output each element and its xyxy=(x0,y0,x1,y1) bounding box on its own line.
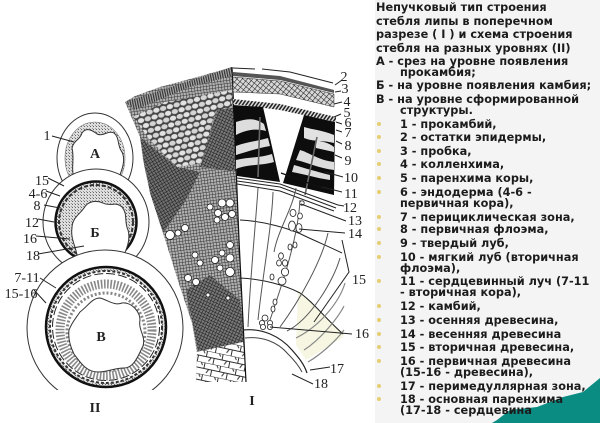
labels and leaders II: II xyxy=(90,401,100,416)
right wood vessels xyxy=(259,201,304,330)
legend heading: структуры. xyxy=(400,104,473,117)
legend heading: Непучковый тип строения xyxy=(376,1,547,14)
labels I: 5 xyxy=(344,106,350,121)
leader lines I xyxy=(270,80,352,384)
legend items: 7 - перициклическая зона, xyxy=(400,211,575,224)
legend items: - вторичная кора), xyxy=(400,286,521,299)
section В: В xyxy=(96,330,106,345)
vessels xyxy=(166,199,236,300)
labels I: 13 xyxy=(348,214,362,229)
rays through phloem xyxy=(258,117,317,195)
labels and leaders II xyxy=(5,129,100,416)
legend items: 13 - осенняя древесина, xyxy=(400,314,558,327)
legend heading: Б - на уровне появления камбия; xyxy=(376,79,591,92)
legend items: 9 - твердый луб, xyxy=(400,237,509,250)
labels I: 3 xyxy=(342,82,348,97)
legend items: 15 - вторичная древесина, xyxy=(400,341,574,354)
legend items: 1 - прокамбий, xyxy=(400,118,497,131)
labels I: 14 xyxy=(348,227,362,242)
labels and leaders II: 16 xyxy=(23,232,37,247)
central dividing line xyxy=(232,67,246,382)
left phloem wedge xyxy=(233,105,280,182)
dark phloem ray left xyxy=(140,137,200,233)
legend heading: В - на уровне сформированной xyxy=(376,93,579,106)
diagram I: left half, micrograph of tissue xyxy=(125,67,246,382)
diagram I: right half, schematic xyxy=(232,67,369,409)
legend items: 16 - первичная древесина xyxy=(400,355,571,368)
legend items: 3 - пробка, xyxy=(400,145,472,158)
diagram II: stem cross-sections xyxy=(5,113,183,416)
labels I: 8 xyxy=(344,139,352,154)
hatched band xyxy=(233,99,336,122)
legend items: 5 - паренхима коры, xyxy=(400,172,533,185)
legend text xyxy=(376,1,591,417)
cortex parenchyma xyxy=(133,90,232,167)
labels I: 16 xyxy=(355,327,369,342)
labels and leaders II: 8 xyxy=(34,199,40,214)
section A: А xyxy=(90,147,101,162)
labels I: 17 xyxy=(330,362,344,377)
labels I: 15 xyxy=(352,273,366,288)
pith cells xyxy=(196,342,247,382)
pale outer wood xyxy=(296,290,344,360)
labels and leaders II: 12 xyxy=(25,216,39,231)
labels I: 9 xyxy=(344,154,352,169)
dark wood sector xyxy=(186,275,244,352)
legend items: 18 - основная паренхима xyxy=(400,393,563,406)
section A xyxy=(57,113,133,203)
cork xyxy=(233,77,334,107)
cork strip xyxy=(125,67,232,110)
phloem wedge xyxy=(200,107,238,172)
labels and leaders II: 1 xyxy=(44,129,50,144)
labels I: 4 xyxy=(344,95,350,110)
wood rays xyxy=(248,188,345,362)
legend heading: прокамбия; xyxy=(400,66,476,79)
labels I: 11 xyxy=(344,187,358,202)
labels I xyxy=(249,70,369,409)
epidermis remnants xyxy=(233,68,333,83)
labels and leaders II: 7-11 xyxy=(14,271,40,286)
legend items: (17-18 - сердцевина xyxy=(400,404,532,417)
legend items: 2 - остатки эпидермы, xyxy=(400,131,546,144)
labels I: 12 xyxy=(343,201,357,216)
cambium lines xyxy=(237,178,338,211)
legend items: флоэма), xyxy=(400,262,460,275)
legend heading: стебля липы в поперечном xyxy=(376,15,553,28)
legend heading xyxy=(376,1,591,117)
legend items: 10 - мягкий луб (вторичная xyxy=(400,251,579,264)
annual ring boundaries xyxy=(240,220,343,334)
legend items: 12 - камбий, xyxy=(400,300,481,313)
labels and leaders II: 15-16 xyxy=(5,287,37,302)
labels I: 6 xyxy=(344,116,352,131)
labels I: I xyxy=(249,394,255,409)
legend items: 11 - сердцевинный луч (7-11 xyxy=(400,275,590,288)
legend heading: А - срез на уровне появления xyxy=(376,55,568,68)
legend items: 6 - эндодерма (4-6 - xyxy=(400,186,532,199)
perimedullary zone arcs xyxy=(243,330,307,373)
labels I: 2 xyxy=(340,70,348,85)
labels and leaders II: 4-6 xyxy=(29,187,47,202)
legend items: первичная кора), xyxy=(400,197,514,210)
panel: legend background xyxy=(375,0,600,423)
right phloem wedge xyxy=(283,115,335,195)
legend items: 4 - колленхима, xyxy=(400,158,504,171)
legend heading: разрезе ( I ) и схема строения xyxy=(376,28,573,41)
section Б: Б xyxy=(90,226,100,241)
legend heading: стебля на разных уровнях (II) xyxy=(376,42,571,55)
labels and leaders II: 18 xyxy=(26,249,40,264)
labels I: 7 xyxy=(344,126,352,141)
legend items: (15-16 - древесина), xyxy=(400,366,533,379)
labels I: 10 xyxy=(344,171,358,186)
labels and leaders II: 15 xyxy=(35,174,49,189)
section В xyxy=(27,250,183,406)
legend items: 17 - перимедуллярная зона, xyxy=(400,380,586,393)
legend items: 14 - весенняя древесина xyxy=(400,328,561,341)
section Б xyxy=(43,169,149,275)
legend items xyxy=(400,118,590,417)
legend items: 8 - первичная флоэма, xyxy=(400,223,548,236)
labels I: 18 xyxy=(314,377,328,392)
legend bullets xyxy=(377,122,381,401)
